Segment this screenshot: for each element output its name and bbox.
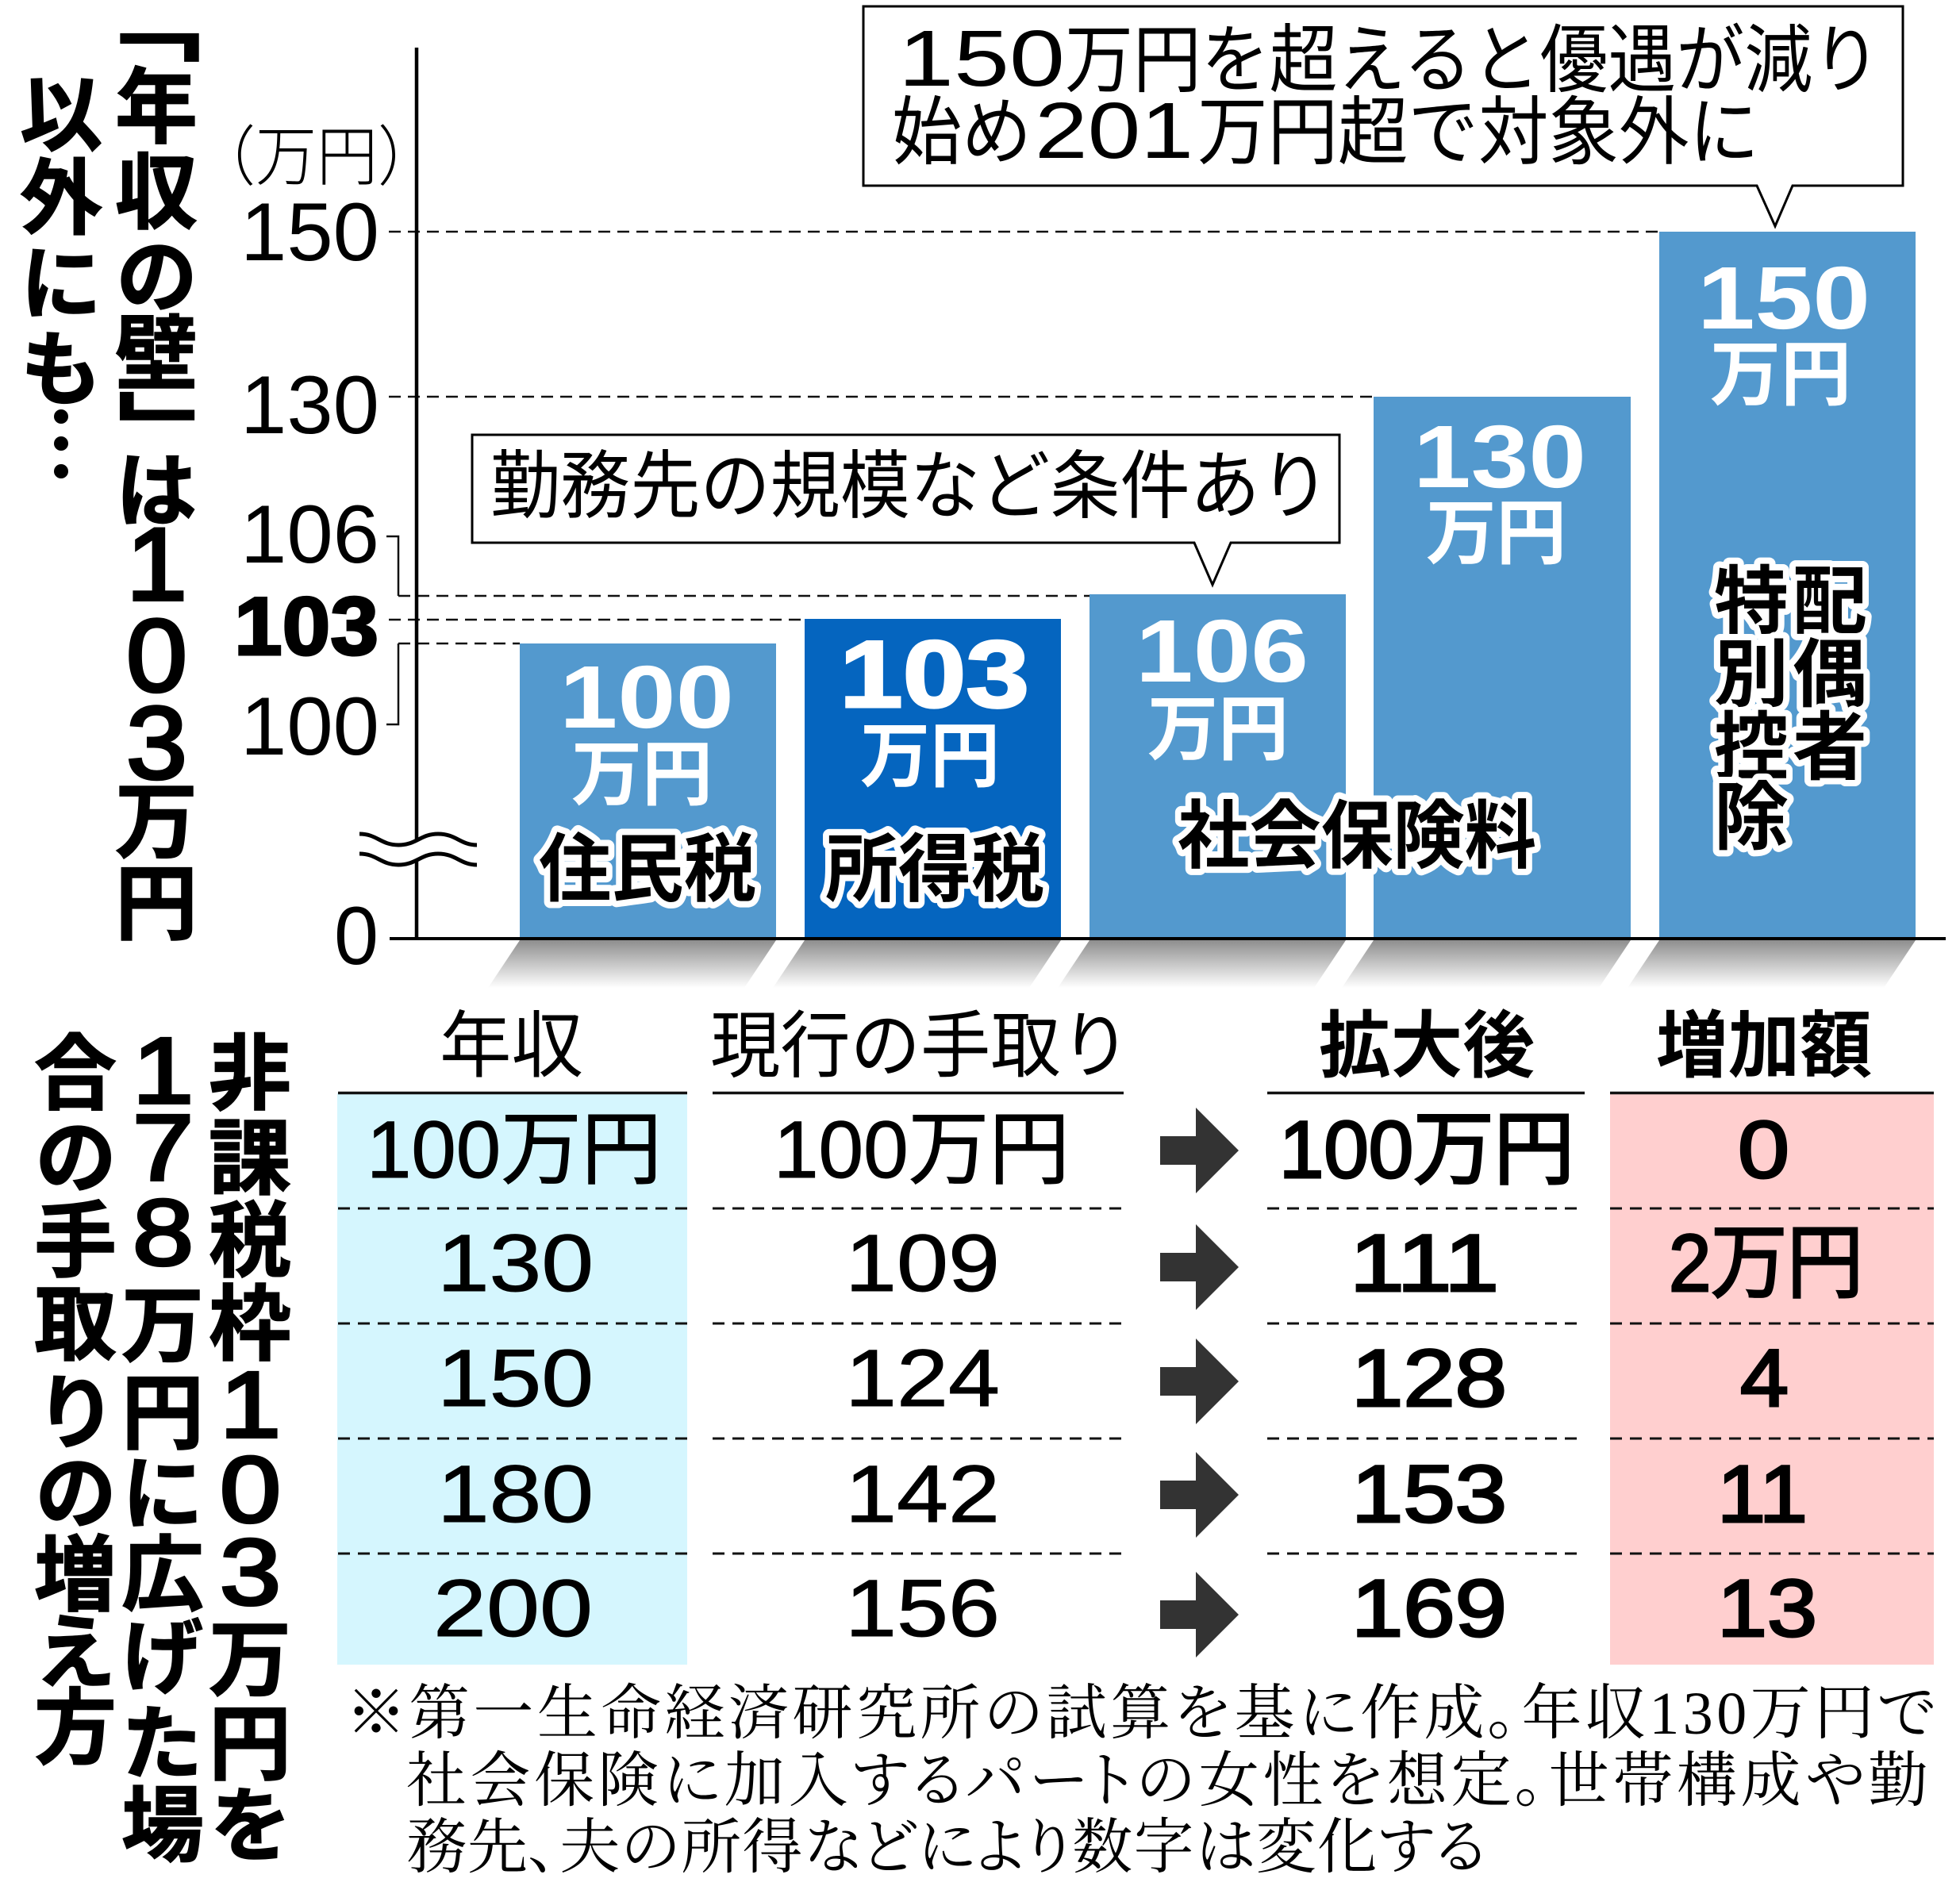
value: 106万円: 106 [1136,601,1309,701]
heading: 以外にも…: 以外にも [2,71,121,409]
heading: 「年収の壁」は103万円: 3 [126,685,187,801]
callout: 150万円 [863,6,1903,226]
heading: 178万円に広げた場 [103,1019,222,1865]
column fills [337,1093,1934,1665]
column: 年収: 200 [433,1563,593,1654]
value: 106万円 [1136,601,1309,774]
value: 150万円: 150 [1697,248,1870,348]
column: 現行の手取り: 124 [845,1333,1000,1423]
bar: 配偶者特別控除 [1659,232,1916,939]
heading: 178万円に広げた場: 万円に広げた場 [103,1282,222,1865]
column: 年収: 180 [437,1449,594,1539]
column: 拡大後: 153 [1351,1449,1507,1539]
callout: 150万円: 万円超で対象外に [1197,90,1759,174]
bar: 130 [1374,397,1631,939]
footnote [346,1680,1935,1881]
axis labels: 150 [240,186,379,278]
table headers [440,987,1872,1093]
column: 増加額: 13 [1717,1563,1817,1654]
callout: 勤務先: 勤務先の規模など条件あり [490,444,1330,528]
heading: 178万円に広げた場: 1 [133,1019,194,1124]
value: 103万円 [840,621,1029,801]
axis break wave [359,834,477,865]
value: 100万円: 万円 [571,716,713,820]
bar: 住民税 [520,643,776,939]
column: 増加額: 4 [1740,1333,1789,1423]
axis labels: 103 [234,581,379,673]
heading: 178万円に広げた場: 8 [133,1181,194,1285]
column: 増加額 [1669,1104,1863,1654]
heading: 178万円に広げた場: 7 [133,1096,194,1200]
value: 103万円: 103 [840,621,1029,728]
bar: 社会保険料 [1090,594,1346,939]
footnote: 務先、夫の所得などにより数字は変化する [406,1815,1485,1881]
label: 特別控除: 特別控除 [1697,562,1805,852]
heading: 「年収の壁」は103万円: 年収の壁 [97,63,216,393]
column: 年収: 130 [437,1218,594,1308]
heading: 非課税枠 [190,1030,309,1865]
heading: 「年収の壁」は103万円: 」 [94,389,248,471]
axis labels: 106 [240,489,379,581]
heading: 非課税枠: 万円を [190,1616,309,1865]
callout: 150万円: 201 [1035,86,1193,175]
column: 現行の手取り: 100万円 [774,1104,1070,1195]
column: 拡大後: 100万円 [1279,1104,1574,1195]
label: 所得税: 所得税 [825,809,1044,917]
heading: 非課税枠: 1 [220,1353,281,1458]
axis labels: 0 [334,890,379,982]
value: 103万円: 万円 [860,698,1000,801]
column: 拡大後 [1279,1104,1574,1654]
heading: 「年収の壁」は103万円: 0 [126,597,187,713]
footnote: 第一生命経済研究所の試算を基に作成。年収130万円で [409,1680,1935,1747]
heading: 「年収の壁」は103万円: 万円 [97,778,216,943]
heading: 「年収の壁」は103万円 [64,0,248,943]
axis labels: 100 [240,681,379,773]
panel: table [337,987,1934,1665]
table headers: 年収 [440,987,583,1093]
table headers: 現行の手取り [710,987,1131,1093]
footnote: 社会保険に加入するパートの女性を想定。世帯構成や勤 [406,1748,1928,1815]
dashed guides and axis [386,48,1659,939]
value: 106万円: 万円 [1147,671,1289,774]
panel: bar chart [194,6,1946,988]
value: 130万円 [1413,407,1586,578]
callout: 150万円: 万円を超えると優遇が減り [1065,18,1881,102]
label: 住民税: 住民税 [539,809,756,917]
column: 拡大後: 111 [1350,1218,1499,1308]
column: 現行の手取り [774,1104,1070,1654]
table headers: 拡大後 [1319,987,1535,1093]
label: 社会保険料: 社会保険料 [1178,776,1536,884]
footnote: ※ [346,1680,406,1747]
table headers: 増加額 [1656,987,1872,1093]
baseline [390,937,1946,940]
value: 130万円: 130 [1413,407,1586,506]
bar: 所得税 [805,619,1061,939]
bar shadows [488,940,1916,988]
value: 100万円: 100 [559,647,734,747]
column: 現行の手取り: 142 [845,1449,1000,1539]
column: 拡大後: 169 [1351,1563,1507,1654]
column: 現行の手取り: 156 [845,1563,1000,1654]
axis labels: 130 [240,359,379,451]
column: 年収: 150 [437,1333,594,1423]
heading: 「年収の壁」は103万円: 1 [126,506,187,622]
value: 130万円: 万円 [1426,475,1566,578]
column: 年収: 100万円 [367,1104,662,1195]
heading: 非課税枠: 0 [220,1438,281,1542]
heading: 非課税枠: 3 [220,1520,281,1625]
heading: 非課税枠: 非課税枠 [190,1030,309,1363]
arrows [1160,1108,1239,1657]
column: 拡大後: 128 [1351,1333,1507,1423]
heading: 「年収の壁」は103万円: は [97,447,216,530]
axis labels [194,121,439,982]
heading: 合の手取りの増え方: 合の手取りの増え方 [16,1030,135,1767]
column: 増加額: 2万円 [1669,1218,1863,1308]
callout: 150万円: 150 [898,14,1065,103]
value: 150万円: 万円 [1710,317,1851,420]
value: 150万円 [1697,248,1870,420]
column: 年収 [367,1104,662,1654]
column: 増加額: 0 [1738,1104,1789,1195]
axis labels: （万円） [194,121,439,194]
callout: 勤務先 [472,435,1339,585]
label: 配偶者: 配偶者 [1776,562,1884,782]
callout: 150万円: 始め [892,90,1032,174]
column: 現行の手取り: 109 [845,1218,1000,1308]
value: 100万円 [559,647,734,820]
column: 増加額: 11 [1717,1449,1808,1539]
rules [338,1093,1934,1554]
